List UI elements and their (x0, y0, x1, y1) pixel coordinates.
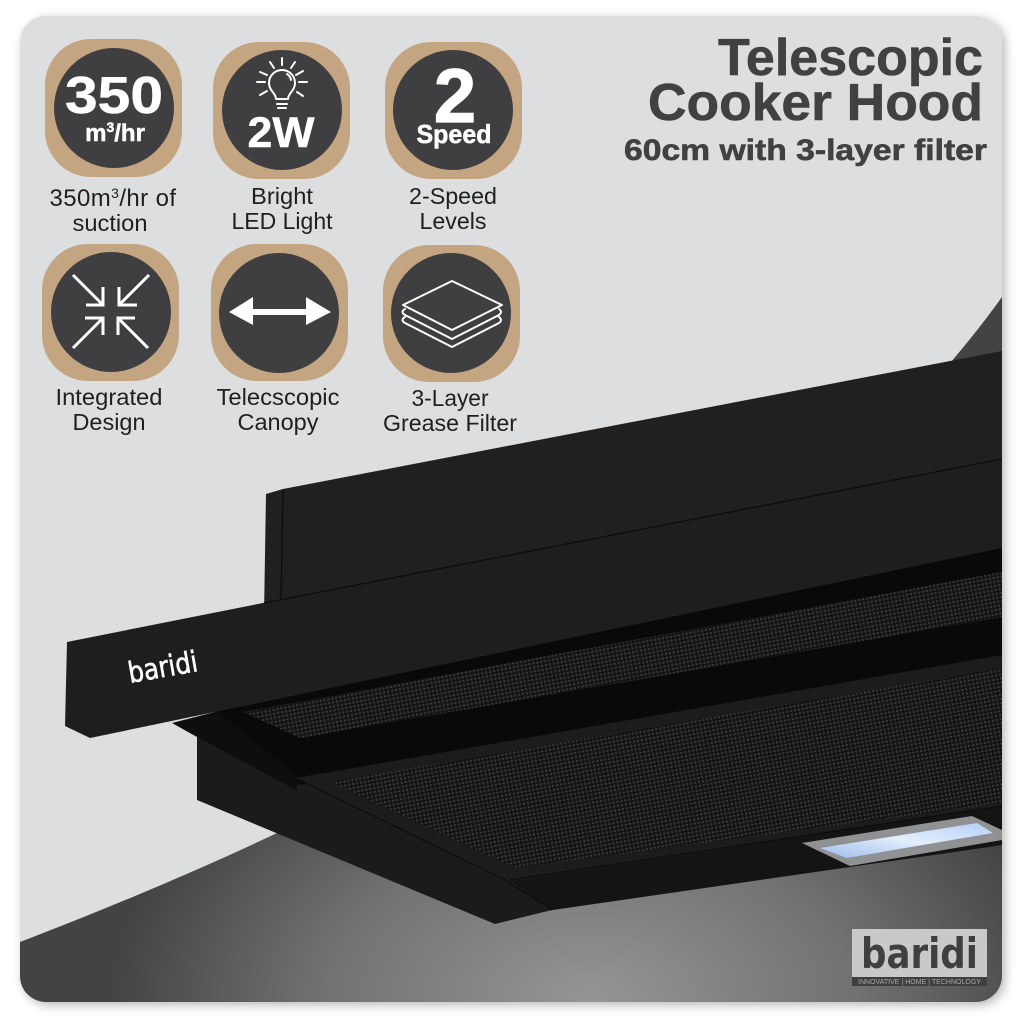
badge unit: Speed (416, 119, 492, 149)
underside recess (203, 530, 1002, 785)
badge unit: /hr (114, 120, 145, 147)
badge tile (385, 42, 522, 179)
badge circle (51, 252, 171, 372)
caption: 3 (111, 185, 119, 201)
badge circle (54, 48, 174, 168)
caption: Canopy (238, 409, 319, 435)
badge circle (391, 253, 511, 373)
hood side shadow (172, 712, 298, 790)
icon: filter layers (402, 281, 502, 347)
badge unit: m (85, 120, 106, 147)
upper grease filter mesh (243, 572, 1002, 738)
caption: Grease Filter (383, 410, 517, 436)
caption: 3-Layer (412, 385, 489, 411)
caption: Integrated (56, 384, 162, 410)
lower grease filter mesh (330, 668, 1002, 868)
caption: Levels (420, 208, 486, 234)
feature: speed levels (385, 42, 522, 234)
caption (383, 385, 517, 436)
lower filter frame (296, 655, 1002, 784)
badge value: 350 (65, 67, 163, 125)
hood underside right strip (552, 845, 1002, 910)
title block (624, 29, 987, 167)
icon: inward arrows (73, 275, 149, 348)
icon: light bulb (257, 58, 307, 108)
title line 2: Cooker Hood (648, 74, 983, 132)
caption: 2-Speed (409, 183, 497, 209)
feature: LED light (213, 42, 350, 234)
feature: suction (45, 39, 182, 236)
logo wordmark: baridi (861, 929, 978, 978)
badge circle (219, 253, 339, 373)
brand logo (852, 929, 987, 986)
caption: 350m (50, 185, 111, 212)
hood brand name: baridi (125, 644, 200, 690)
caption: suction (72, 210, 148, 236)
feature: integrated design (42, 244, 179, 435)
hood lower body (197, 737, 1001, 924)
caption: /hr of (119, 185, 176, 212)
badge tile (383, 245, 520, 382)
hood edge lines (264, 459, 1002, 910)
badge circle (222, 50, 342, 170)
caption: Design (72, 409, 146, 435)
logo strip (852, 977, 987, 986)
caption: Bright (251, 183, 314, 209)
caption (50, 185, 176, 236)
subtitle: 60cm with 3-layer filter (624, 134, 987, 167)
caption (232, 183, 333, 234)
badge tile (213, 42, 350, 179)
LED light panel (802, 816, 1002, 866)
badge value: 2 (434, 54, 476, 139)
caption (56, 384, 162, 435)
badge tile (211, 244, 348, 381)
title line 1: Telescopic (718, 29, 983, 87)
badge unit: 3 (106, 119, 114, 135)
feature: telescopic canopy (211, 244, 348, 435)
logo panel (852, 929, 987, 977)
caption: LED Light (232, 208, 333, 234)
badge circle (393, 50, 513, 170)
logo tagline: INNOVATIVE | HOME | TECHNOLOGY (858, 979, 981, 986)
hood front bar (65, 459, 1002, 738)
cooker hood product (65, 351, 1002, 924)
hood upper back panel (264, 351, 1002, 615)
dark curved floor backdrop (20, 297, 1002, 1002)
badge tile (45, 39, 182, 177)
badge tile (42, 244, 179, 381)
badge value: 2W (248, 109, 315, 157)
caption (216, 384, 340, 435)
caption: Telecscopic (216, 384, 340, 410)
feature: grease filter (383, 245, 520, 436)
caption (409, 183, 497, 234)
icon: double arrow (229, 297, 331, 325)
